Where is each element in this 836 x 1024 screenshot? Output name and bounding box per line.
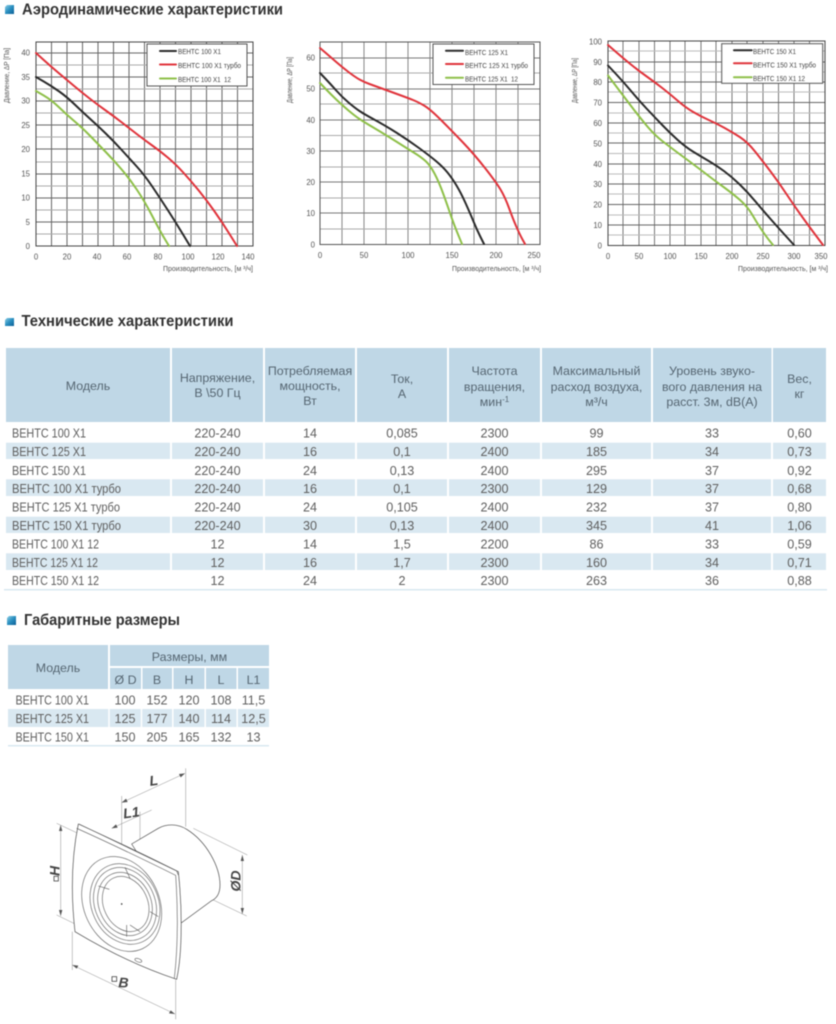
- table header: Модель: [66, 379, 110, 393]
- legend: [147, 44, 247, 86]
- row: ВЕНТС 150 X1: ВЕНТС 150 X1: [12, 464, 86, 478]
- label B: B: [118, 974, 129, 991]
- axis labels: 0: [34, 252, 39, 262]
- curve: standard: [36, 77, 190, 246]
- row: ВЕНТС 125 X1: 125: [114, 712, 136, 726]
- row: ВЕНТС 125 X1 12: ВЕНТС 125 X1 12: [12, 556, 98, 570]
- axis labels: 30: [593, 180, 603, 189]
- table header: Потребляемая: [268, 364, 352, 378]
- row: ВЕНТС 125 X1: [16, 712, 266, 726]
- axis labels: 120: [211, 252, 225, 262]
- axis labels: 0: [318, 251, 323, 260]
- row: ВЕНТС 100 X1 турбо: 37: [705, 482, 719, 496]
- axis labels: 60: [593, 119, 603, 128]
- row: ВЕНТС 150 X1 12: 12: [210, 574, 225, 588]
- table header: -1: [502, 395, 510, 404]
- row: ВЕНТС 150 X1: 205: [146, 730, 168, 744]
- axis labels: 80: [154, 252, 163, 262]
- curve: 12 V: [36, 91, 169, 246]
- row: ВЕНТС 150 X1 12: [12, 574, 812, 588]
- axis labels: 150: [694, 252, 708, 261]
- row: ВЕНТС 100 X1: 0,085: [386, 426, 418, 440]
- axis labels: [285, 54, 541, 273]
- row: ВЕНТС 100 X1 12: ВЕНТС 100 X1 12: [12, 538, 99, 552]
- legend: ВЕНТС 125 X1 турбо: [465, 61, 528, 70]
- centre mark: [121, 903, 122, 905]
- axis labels: 80: [593, 78, 603, 87]
- table header: Максимальный: [553, 364, 640, 378]
- axis labels: [2, 48, 255, 273]
- table header: Напряжение,: [180, 371, 255, 385]
- label H: [46, 865, 62, 881]
- table: dimensions: [8, 645, 269, 746]
- table header: Частота: [472, 364, 518, 378]
- row: ВЕНТС 150 X1 12: 2: [398, 574, 406, 588]
- row: ВЕНТС 150 X1 турбо: 0,13: [390, 519, 414, 533]
- row: ВЕНТС 100 X1: 0,60: [787, 426, 812, 440]
- axis labels: 20: [21, 145, 31, 154]
- row: ВЕНТС 150 X1: [12, 464, 812, 478]
- row: ВЕНТС 125 X1 турбо: [12, 500, 812, 514]
- table header: расст. 3м, dB(A): [666, 395, 758, 409]
- table header: В \50 Гц: [194, 386, 241, 400]
- table header: Вес,: [787, 372, 812, 386]
- axis labels: 30: [306, 147, 316, 156]
- legend: ВЕНТС 125 X1: [465, 48, 508, 57]
- axis labels: Давление, ΔP [Па]: [2, 48, 11, 103]
- label D: ØD: [228, 871, 244, 891]
- row: ВЕНТС 100 X1: 33: [705, 426, 719, 440]
- table header: А: [398, 387, 407, 401]
- table header: м³/ч: [585, 395, 608, 409]
- legend: ВЕНТС 150 X1: [753, 47, 796, 56]
- axis labels: 0: [606, 252, 611, 261]
- row: ВЕНТС 150 X1 12: 2300: [480, 574, 509, 588]
- label B: [112, 974, 129, 991]
- row: ВЕНТС 150 X1: 0,92: [787, 464, 812, 478]
- axis labels: 25: [21, 121, 31, 130]
- axis labels: 50: [635, 252, 644, 261]
- chart: VENTS 150 X1: [570, 38, 828, 273]
- axis labels: 60: [123, 252, 132, 262]
- row: ВЕНТС 150 X1: 295: [586, 464, 607, 478]
- dimensions header: Ø D: [114, 673, 137, 687]
- row: ВЕНТС 100 X1: 220-240: [194, 426, 241, 440]
- axis labels: 60: [306, 54, 316, 62]
- chart: VENTS 100 X1: [2, 42, 255, 273]
- row: ВЕНТС 100 X1: [12, 426, 812, 440]
- legend: [722, 44, 823, 83]
- row: ВЕНТС 125 X1 12: 16: [303, 556, 317, 570]
- row: ВЕНТС 125 X1 турбо: 220-240: [194, 500, 241, 514]
- row: ВЕНТС 125 X1 12: 0,71: [787, 556, 812, 570]
- row: ВЕНТС 100 X1 турбо: 16: [303, 482, 317, 496]
- row: ВЕНТС 125 X1: 16: [303, 445, 317, 459]
- row: ВЕНТС 150 X1: 2400: [480, 464, 509, 478]
- row: ВЕНТС 100 X1 12: [12, 538, 812, 552]
- row: ВЕНТС 150 X1 турбо: 30: [303, 519, 317, 533]
- row: ВЕНТС 100 X1 турбо: [12, 482, 812, 496]
- row: ВЕНТС 125 X1: ВЕНТС 125 X1: [16, 712, 89, 726]
- dimensions header: L1: [247, 673, 260, 687]
- axis labels: 40: [306, 116, 316, 125]
- row: ВЕНТС 125 X1 турбо: 37: [705, 500, 719, 514]
- row: ВЕНТС 100 X1 12: 14: [303, 538, 317, 552]
- axis labels: [570, 38, 828, 273]
- label L1: L1: [122, 803, 141, 821]
- axis labels: 300: [787, 252, 801, 261]
- row: ВЕНТС 150 X1 турбо: 220-240: [194, 519, 241, 533]
- row: ВЕНТС 100 X1 12: 2200: [480, 538, 509, 552]
- curve: 12 V: [320, 83, 462, 244]
- row: ВЕНТС 100 X1 турбо: 129: [586, 482, 607, 496]
- axis labels: Производительность, [м ³/ч]: [163, 264, 253, 273]
- row: ВЕНТС 125 X1: ВЕНТС 125 X1: [12, 445, 86, 459]
- row: ВЕНТС 150 X1 12: 36: [705, 574, 719, 588]
- axis labels: 0: [26, 242, 31, 251]
- row: ВЕНТС 100 X1 турбо: 220-240: [194, 482, 241, 496]
- row: ВЕНТС 150 X1: [16, 730, 261, 744]
- axis labels: Давление, ΔP [Па]: [570, 58, 579, 103]
- axis labels: 200: [725, 252, 739, 261]
- row: ВЕНТС 150 X1 12: ВЕНТС 150 X1 12: [12, 574, 99, 588]
- row: ВЕНТС 125 X1 12: 34: [705, 556, 719, 570]
- axis labels: 100: [181, 252, 195, 262]
- dimensions header: Размеры, мм: [152, 650, 227, 664]
- row: ВЕНТС 150 X1 12: 24: [303, 574, 317, 588]
- row: ВЕНТС 125 X1 турбо: 0,105: [386, 500, 418, 514]
- dimensions header: L: [218, 673, 225, 687]
- axis labels: 15: [21, 170, 31, 178]
- axis labels: 140: [241, 252, 255, 262]
- axis labels: 40: [21, 48, 31, 58]
- row: ВЕНТС 150 X1 12: 263: [586, 574, 607, 588]
- axis labels: 100: [401, 251, 415, 260]
- row: ВЕНТС 125 X1 12: 160: [586, 556, 607, 570]
- grille rings: [67, 843, 177, 965]
- dimension lines: [57, 768, 247, 1019]
- row: ВЕНТС 100 X1: [16, 694, 265, 708]
- label L: L: [148, 772, 159, 789]
- dimensions header: Модель: [36, 661, 80, 675]
- row: ВЕНТС 150 X1: 165: [178, 730, 200, 744]
- row: ВЕНТС 125 X1: 2400: [480, 445, 509, 459]
- row: ВЕНТС 100 X1 турбо: 0,1: [393, 482, 411, 496]
- heading: aerodynamic characteristics: Аэродинамические характеристики: [22, 2, 283, 18]
- row: ВЕНТС 125 X1 турбо: 24: [303, 500, 317, 514]
- row: ВЕНТС 125 X1 турбо: 2400: [480, 500, 509, 514]
- row: ВЕНТС 150 X1 турбо: 2400: [480, 519, 509, 533]
- panel rim: [77, 824, 178, 978]
- axis labels: 10: [21, 194, 31, 202]
- table header: вого давления на: [662, 380, 762, 394]
- row: ВЕНТС 125 X1: 34: [705, 445, 719, 459]
- legend: ВЕНТС 125 X1 12: [465, 74, 518, 84]
- table header: мин: [480, 395, 502, 409]
- legend: ВЕНТС 100 X1 турбо: [178, 61, 241, 70]
- row: ВЕНТС 150 X1 турбо: 1,06: [787, 519, 812, 533]
- curve: 12 V: [608, 76, 773, 245]
- row: ВЕНТС 100 X1: 108: [210, 694, 232, 708]
- axis labels: 0: [598, 242, 603, 250]
- row: ВЕНТС 125 X1: 0,73: [787, 445, 812, 459]
- row: ВЕНТС 125 X1: 114: [211, 712, 231, 726]
- row: ВЕНТС 150 X1: 13: [246, 730, 261, 744]
- drawing: fan with dimensions: [46, 768, 247, 1019]
- axis labels: 40: [593, 160, 603, 169]
- row: ВЕНТС 100 X1: 11,5: [242, 694, 265, 708]
- axis labels: Производительность, [м ³/ч]: [738, 264, 828, 273]
- row: ВЕНТС 100 X1: 100: [114, 694, 136, 708]
- row: ВЕНТС 150 X1 турбо: ВЕНТС 150 X1 турбо: [12, 519, 121, 533]
- row: ВЕНТС 100 X1 12: 1,5: [393, 538, 411, 552]
- legend: ВЕНТС 100 X1: [178, 47, 221, 56]
- axis labels: 30: [21, 96, 31, 106]
- axis labels: 20: [63, 252, 72, 262]
- table header: вращения,: [464, 380, 525, 394]
- axis labels: 0: [311, 240, 316, 250]
- row: ВЕНТС 100 X1: 152: [146, 694, 168, 708]
- row: ВЕНТС 100 X1: 14: [303, 426, 317, 440]
- row: ВЕНТС 100 X1 12: 86: [589, 538, 604, 552]
- row: ВЕНТС 125 X1 12: 2300: [480, 556, 509, 570]
- panel indicator: [134, 958, 142, 963]
- axis labels: 5: [26, 218, 31, 227]
- row: ВЕНТС 125 X1: 12,5: [241, 712, 266, 726]
- row: ВЕНТС 125 X1: [12, 445, 812, 459]
- table header: Ток,: [391, 372, 413, 386]
- axis labels: 100: [663, 252, 677, 261]
- legend: [433, 44, 534, 84]
- axis labels: 10: [593, 221, 603, 230]
- axis labels: 150: [445, 251, 459, 260]
- chart: VENTS 125 X1: [285, 42, 541, 273]
- axis labels: 10: [306, 209, 316, 218]
- row: ВЕНТС 100 X1 турбо: ВЕНТС 100 X1 турбо: [12, 482, 121, 496]
- row: ВЕНТС 100 X1 12: 33: [705, 538, 719, 552]
- row: ВЕНТС 100 X1: 2300: [480, 426, 509, 440]
- axis labels: 50: [306, 84, 316, 94]
- dimensions row band: [8, 709, 269, 746]
- curve: turbo: [320, 48, 525, 244]
- axis labels: 20: [306, 178, 316, 187]
- heading: technical characteristics: Технические характеристики: [22, 313, 234, 330]
- row: ВЕНТС 150 X1: 220-240: [194, 464, 241, 478]
- legend: ВЕНТС 150 X1 12: [753, 74, 805, 83]
- row: ВЕНТС 125 X1 турбо: 232: [586, 500, 607, 514]
- axis labels: 90: [593, 58, 603, 67]
- row: ВЕНТС 150 X1: 150: [114, 730, 136, 744]
- table header: расход воздуха,: [551, 380, 642, 394]
- legend: ВЕНТС 100 X1 12: [178, 75, 231, 84]
- table header: кг: [795, 387, 805, 401]
- axis labels: 350: [814, 252, 828, 261]
- table header: Вт: [303, 394, 317, 408]
- row: ВЕНТС 100 X1: 120: [178, 694, 200, 708]
- row: ВЕНТС 150 X1: ВЕНТС 150 X1: [16, 730, 89, 744]
- curve: standard: [320, 73, 484, 244]
- row: ВЕНТС 125 X1 12: 1,7: [393, 556, 411, 570]
- row: ВЕНТС 125 X1 турбо: 0,80: [787, 500, 812, 514]
- row: ВЕНТС 150 X1 турбо: 41: [705, 519, 719, 533]
- row: ВЕНТС 125 X1 12: [12, 556, 812, 570]
- row: ВЕНТС 150 X1: 0,13: [390, 464, 414, 478]
- row: ВЕНТС 150 X1: 37: [705, 464, 719, 478]
- row: ВЕНТС 100 X1 12: 0,59: [787, 538, 812, 552]
- fan body cylinder: [132, 825, 220, 923]
- row: ВЕНТС 100 X1: ВЕНТС 100 X1: [16, 694, 89, 708]
- axis labels: 250: [756, 252, 770, 261]
- row: ВЕНТС 100 X1 турбо: 0,68: [787, 482, 812, 496]
- axis labels: 70: [593, 98, 603, 108]
- table header: [6, 348, 826, 422]
- label H: H: [46, 865, 62, 876]
- table row bands: [4, 442, 827, 590]
- axis labels: 35: [21, 73, 31, 82]
- axis labels: 50: [593, 140, 603, 148]
- table header: Уровень звуко-: [669, 364, 755, 378]
- axis labels: 50: [360, 251, 369, 260]
- row: ВЕНТС 125 X1 турбо: ВЕНТС 125 X1 турбо: [12, 500, 120, 514]
- row: ВЕНТС 100 X1: ВЕНТС 100 X1: [12, 426, 86, 440]
- axis labels: 200: [489, 251, 503, 260]
- dimensions header: H: [185, 673, 193, 687]
- heading: overall dimensions: Габаритные размеры: [24, 612, 180, 629]
- curve: standard: [608, 66, 794, 245]
- legend: ВЕНТС 150 X1 турбо: [753, 60, 816, 70]
- axis labels: 250: [527, 251, 541, 260]
- dimensions header: [8, 645, 269, 689]
- axis labels: 100: [589, 38, 603, 46]
- fan front panel: [72, 824, 181, 979]
- row: ВЕНТС 150 X1 турбо: [12, 519, 812, 533]
- row: ВЕНТС 125 X1: 185: [586, 445, 607, 459]
- row: ВЕНТС 150 X1 12: 0,88: [787, 574, 812, 588]
- row: ВЕНТС 125 X1: 0,1: [393, 445, 411, 459]
- axis labels: Производительность, [м ³/ч]: [452, 264, 541, 273]
- row: ВЕНТС 125 X1: 140: [178, 712, 200, 726]
- row: ВЕНТС 125 X1: 177: [146, 712, 168, 726]
- row: ВЕНТС 150 X1: 24: [303, 464, 317, 478]
- axis labels: 40: [93, 252, 102, 262]
- row: ВЕНТС 125 X1 12: 12: [210, 556, 225, 570]
- row: ВЕНТС 100 X1 турбо: 2300: [480, 482, 509, 496]
- row: ВЕНТС 100 X1 12: 12: [210, 538, 225, 552]
- axis labels: 20: [593, 200, 603, 210]
- axis labels: Давление, ΔP [Па]: [285, 57, 294, 103]
- table: technical characteristics: [4, 348, 827, 590]
- table header: мощность,: [279, 379, 341, 393]
- row: ВЕНТС 100 X1: 99: [589, 426, 604, 440]
- row: ВЕНТС 125 X1: 220-240: [194, 445, 241, 459]
- dimensions header: B: [153, 673, 161, 687]
- row: ВЕНТС 150 X1 турбо: 345: [586, 519, 607, 533]
- curve: turbo: [36, 53, 237, 246]
- row: ВЕНТС 150 X1: 132: [210, 730, 232, 744]
- curve: turbo: [608, 45, 823, 245]
